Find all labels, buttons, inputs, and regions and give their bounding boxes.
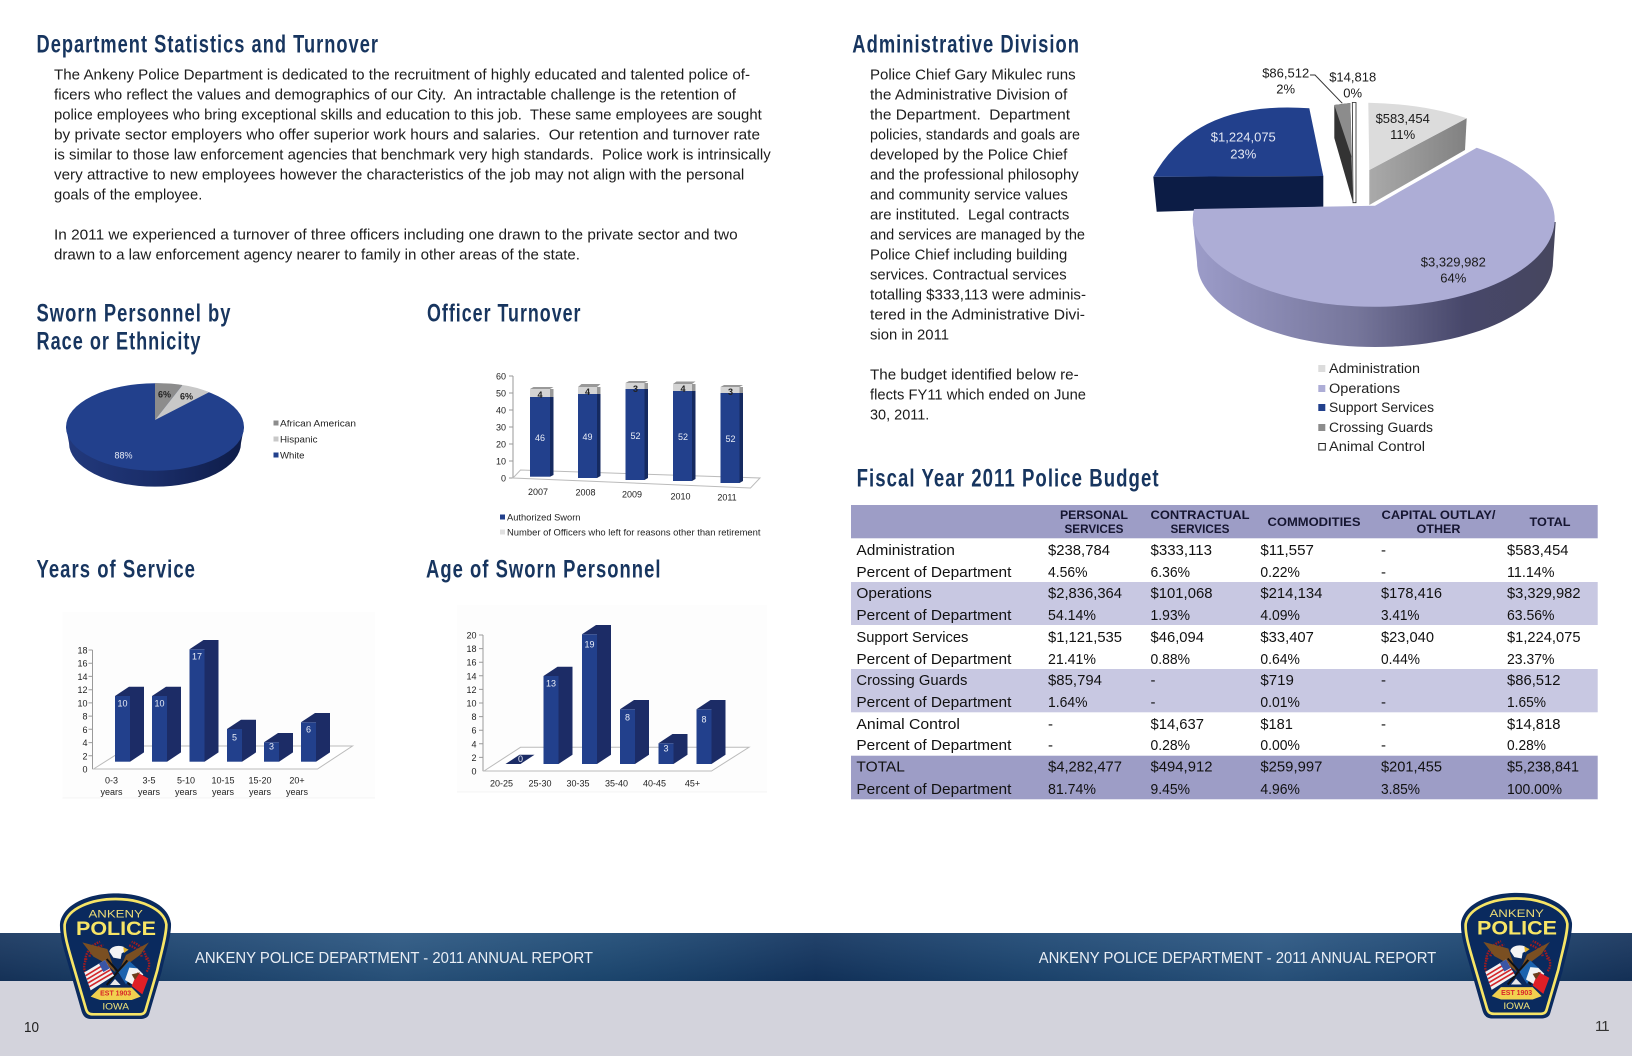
text block: department statistics: In 2011 we experienced a turnover of three officers including one drawn to the private sector and two [54,226,738,243]
row: Crossing Guards: Crossing Guards [856,672,967,689]
heading: Years of Service: Years of Service [36,556,196,584]
bar chart: age of sworn personnel: 8 [625,712,630,722]
bar chart: years of service: 17 [192,652,202,662]
row: TOTAL [856,759,1579,798]
table: police budget [851,505,1598,799]
bar chart: officer turnover: 20 [496,440,506,450]
legend: officer turnover [500,512,761,538]
bar chart: officer turnover: 60 [496,372,506,382]
bar chart: years of service: 16 [77,659,88,669]
bar chart: officer turnover [496,372,760,502]
bar chart: officer turnover: 4 [537,390,543,400]
text block: department statistics: police employees who bring exceptional skills and education to this job. These same employees are sought [54,106,763,123]
table header: SERVICES [1064,524,1124,536]
text block: administrative division: policies, standards and goals are [870,126,1080,143]
row: TOTAL: $259,997 [1260,759,1322,776]
bar chart: years of service: 3 [269,742,274,752]
row: Support Services: $1,121,535 [1048,629,1122,646]
bar chart: years of service [62,612,375,798]
bar chart: years of service: years [138,787,160,797]
pie chart: race or ethnicity: 6% [158,390,171,400]
row: Animal Control: 0.28% [1150,737,1190,754]
bar chart: officer turnover: 0 [501,474,506,484]
icon: police badge left: ANKENY [88,909,144,921]
bar chart: age of sworn personnel: 6 [471,726,476,736]
text block: department statistics: very attractive to new employees however the characteristics of the job may not align with the personal [54,166,744,183]
row: Crossing Guards: 0.01% [1260,694,1300,711]
row: Support Services: $23,040 [1381,629,1434,646]
legend: race or ethnicity: African American [280,418,356,428]
icon: police badge left [60,893,171,1019]
bar chart: officer turnover: 10 [496,456,506,466]
bar chart: years of service: years [249,787,272,797]
icon: police badge right: ANKENY [1489,908,1545,920]
row: Animal Control: - [1048,737,1053,754]
legend: race or ethnicity: White [280,450,304,460]
bar chart: years of service: 8 [82,712,88,722]
row: Support Services: 23.37% [1507,651,1554,668]
pie chart: race or ethnicity [66,383,244,487]
row: Animal Control: $14,818 [1507,716,1560,733]
row: Administration: Percent of Department [856,564,1012,581]
table header: OTHER [1416,524,1461,536]
text block: administrative division: the Administrative Division of [870,86,1068,103]
legend: budget by division: Animal Control [1329,439,1425,454]
row: Administration: $333,113 [1150,542,1212,559]
row: Animal Control: $14,637 [1150,716,1204,733]
row: Crossing Guards: - [1381,694,1386,711]
text block: administrative division: and community service values [870,186,1068,203]
table header: COMMODITIES [1268,517,1361,529]
row: Crossing Guards: $719 [1260,672,1294,689]
pie chart: budget by division: 2% [1276,82,1296,96]
row: Animal Control [856,716,1560,754]
bar chart: years of service: 10 [77,698,88,708]
row: Operations: 63.56% [1507,607,1554,624]
icon: police badge right [1461,893,1572,1018]
row: TOTAL: 9.45% [1150,781,1190,798]
bar chart: age of sworn personnel: 10 [466,698,476,708]
row: Operations [856,585,1580,624]
row: Support Services: $46,094 [1150,629,1204,646]
bar chart: years of service: 14 [77,672,88,682]
text block: administrative division: flects FY11 which ended on June [870,386,1086,403]
row: Support Services: Support Services [856,629,968,646]
row: Support Services: 0.64% [1260,651,1300,668]
row: Operations: $2,836,364 [1048,585,1122,602]
bar chart: officer turnover: 3 [728,387,733,397]
row: Crossing Guards: 1.65% [1507,694,1546,711]
row: Support Services [856,629,1580,668]
bar chart: age of sworn personnel: 20-25 [490,778,513,788]
row: TOTAL: Percent of Department [856,781,1012,798]
footer text: left page: ANKENY POLICE DEPARTMENT - 2011 ANNUAL REPORT [195,950,593,967]
row: Operations: 3.41% [1381,607,1420,624]
bar chart: officer turnover: 52 [678,432,688,442]
bar chart: officer turnover: 30 [496,422,506,432]
bar chart: years of service: 4 [82,738,88,748]
text block: department statistics: drawn to a law enforcement agency nearer to family in other areas of the state. [54,246,580,263]
row: Administration: $238,784 [1048,542,1110,559]
bar chart: officer turnover: 2011 [717,492,737,502]
row: TOTAL: $201,455 [1381,759,1442,776]
bar chart: officer turnover: 4 [585,387,590,397]
row: Administration: 4.56% [1048,564,1088,581]
bar chart: age of sworn personnel: 2 [471,753,476,763]
row: Administration: 0.22% [1260,564,1300,581]
row: Administration: $11,557 [1260,542,1314,559]
bar chart: officer turnover: 2008 [575,488,596,498]
bar chart: age of sworn personnel: 40-45 [643,778,666,788]
bar chart: age of sworn personnel [457,605,767,792]
heading: Sworn Personnel by Race or Ethnicity: Sworn Personnel by [36,300,232,328]
bar chart: years of service: 2 [82,751,88,761]
icon: police badge left: IOWA [102,1001,129,1011]
row: Animal Control: 0.00% [1260,737,1300,754]
row: Crossing Guards: $86,512 [1507,672,1560,689]
bar chart: age of sworn personnel: 18 [466,644,476,654]
row: Animal Control: Animal Control [856,716,960,733]
text block: administrative division: the Department. Department [870,106,1071,123]
table header: SERVICES [1170,524,1230,536]
icon: police badge left: POLICE [76,919,156,940]
text block: department statistics: goals of the employee. [54,186,202,203]
icon: police badge right: POLICE [1477,918,1557,939]
bar chart: age of sworn personnel: 0 [518,754,523,764]
row: Administration: Administration [856,542,955,559]
bar chart: officer turnover: 3 [633,384,638,394]
row: Operations: 1.93% [1150,607,1190,624]
bar chart: age of sworn personnel: 12 [466,685,476,695]
bar chart: years of service: 0 [82,764,88,774]
bar chart: years of service: 10 [117,698,128,708]
icon: police badge right: IOWA [1503,1001,1530,1011]
bar chart: years of service: years [175,787,198,797]
text block: administrative division [870,66,1086,423]
row: TOTAL: $5,238,841 [1507,759,1579,776]
legend: race or ethnicity: Hispanic [280,434,318,444]
bar chart: age of sworn personnel: 30-35 [566,778,590,788]
pie chart: budget by division [1153,66,1556,347]
bar chart: years of service: 12 [77,685,88,695]
bar chart: age of sworn personnel: 8 [471,712,476,722]
bar chart: age of sworn personnel: 20 [466,630,476,640]
row: Operations: Percent of Department [856,607,1012,624]
pie chart: budget by division: $1,224,075 [1211,130,1276,144]
heading: Administrative Division: Administrative Division [852,31,1080,59]
row: Administration [856,542,1568,581]
bar chart: officer turnover: 40 [496,406,506,416]
row: Crossing Guards: - [1150,672,1156,689]
bar chart: years of service: 18 [77,646,88,656]
heading: Sworn Personnel by Race or Ethnicity: Race or Ethnicity [36,327,202,355]
bar chart: years of service: 15-20 [248,776,272,786]
text block: administrative division: and the professional philosophy [870,166,1079,183]
bar chart: age of sworn personnel: 16 [466,658,476,668]
row: Support Services: 21.41% [1048,651,1096,668]
bar chart: age of sworn personnel: 35-40 [605,778,628,788]
row: Support Services: 0.44% [1381,651,1420,668]
bar chart: years of service: 3-5 [142,776,156,786]
table header: TOTAL [1530,517,1570,529]
row: Operations: $178,416 [1381,585,1442,602]
row: Crossing Guards [856,672,1560,711]
bar chart: officer turnover: 52 [725,434,736,444]
icon: police badge left: EST 1903 [100,991,131,998]
page number: 10: 10 [24,1019,39,1036]
bar chart: years of service: years [212,787,234,797]
text block: administrative division: and services are managed by the [870,226,1085,243]
pie chart: budget by division: $86,512 [1262,66,1309,80]
bar chart: years of service: 5-10 [177,776,195,786]
legend: budget by division [1318,361,1434,454]
row: Crossing Guards: - [1381,672,1386,689]
heading: Department Statistics and Turnover: Department Statistics and Turnover [36,31,379,59]
text block: administrative division: services. Contractual services [870,266,1067,283]
text block: administrative division: Police Chief including building [870,246,1067,263]
bar chart: years of service: years [100,787,123,797]
bar chart: officer turnover: 2007 [528,487,548,497]
bar chart: years of service: years [286,787,308,797]
legend: budget by division: Administration [1329,361,1420,376]
row: TOTAL: $4,282,477 [1048,759,1122,776]
row: TOTAL: 3.85% [1381,781,1420,798]
legend: budget by division: Operations [1329,381,1400,396]
row: Support Services: $33,407 [1260,629,1314,646]
row: Support Services: Percent of Department [856,651,1012,668]
table header [1060,510,1570,536]
footer text: right page: ANKENY POLICE DEPARTMENT - 2011 ANNUAL REPORT [1039,950,1436,967]
bar chart: age of sworn personnel: 0 [471,766,476,776]
pie chart: budget by division: $14,818 [1329,70,1376,84]
row: Crossing Guards: - [1150,694,1156,711]
row: Administration: - [1381,564,1386,581]
pie chart: budget by division: 0% [1343,86,1363,100]
row: Animal Control: - [1381,737,1386,754]
bar chart: years of service: 6 [306,724,311,734]
text block: department statistics: by private sector employers who offer superior work hours and salaries. Our retention and turnover rate [54,126,760,143]
bar chart: age of sworn personnel: 19 [584,640,595,650]
heading: Age of Sworn Personnel: Age of Sworn Personnel [426,556,662,584]
text block: administrative division: developed by the Police Chief [870,146,1068,163]
legend: officer turnover: Authorized Sworn [507,512,580,522]
row: Operations: 54.14% [1048,607,1096,624]
pie chart: budget by division: $3,329,982 [1421,254,1486,270]
pie chart: budget by division: $583,454 [1376,111,1430,126]
row: TOTAL: 100.00% [1507,781,1562,798]
legend: officer turnover: Number of Officers who left for reasons other than retirement [507,528,761,538]
row: Operations: $214,134 [1260,585,1322,602]
text block: administrative division: sion in 2011 [870,326,949,343]
bar chart: years of service: 0-3 [105,776,118,786]
row: Administration: 6.36% [1150,564,1190,581]
row: Animal Control: 0.28% [1507,737,1546,754]
footer: blue band [0,933,1632,981]
bar chart: officer turnover: 49 [582,432,593,442]
row: Operations: 4.09% [1260,607,1300,624]
text block: administrative division: are instituted. Legal contracts [870,206,1069,223]
bar chart: age of sworn personnel: 25-30 [528,778,552,788]
row: Animal Control: - [1381,716,1386,733]
row: Crossing Guards: 1.64% [1048,694,1088,711]
row: Support Services: $1,224,075 [1507,629,1580,646]
table header: CAPITAL OUTLAY/ [1382,510,1496,522]
pie chart: race or ethnicity: 6% [180,392,193,402]
row: Administration: - [1381,542,1386,559]
row: TOTAL: 81.74% [1048,781,1096,798]
table header: CONTRACTUAL [1150,510,1250,522]
bar chart: age of sworn personnel: 45+ [685,778,700,788]
bar chart: officer turnover: 46 [535,433,545,443]
bar chart: age of sworn personnel: 13 [546,678,556,688]
bar chart: officer turnover: 2010 [670,492,691,502]
row: TOTAL: TOTAL [856,759,905,776]
pie chart: budget by division: 11% [1390,127,1416,142]
row: TOTAL: 4.96% [1260,781,1300,798]
legend: budget by division: Crossing Guards [1329,420,1433,435]
bar chart: years of service: 10-15 [211,776,235,786]
pie chart: budget by division: 64% [1440,270,1467,286]
text block: administrative division: Police Chief Gary Mikulec runs [870,66,1076,83]
bar chart: age of sworn personnel: 3 [663,744,669,754]
bar chart: years of service: 5 [232,732,237,742]
text block: administrative division: totalling $333,113 were adminis- [870,286,1086,303]
text block: administrative division: The budget identified below re- [870,366,1079,383]
text block: administrative division: tered in the Administrative Divi- [870,306,1085,323]
text block: department statistics [54,66,771,263]
row: Crossing Guards: Percent of Department [856,694,1012,711]
bar chart: officer turnover: 2009 [622,490,642,500]
bar chart: years of service: 20+ [289,776,305,786]
pie chart: budget by division: 23% [1230,146,1257,162]
row: Operations: $3,329,982 [1507,585,1580,602]
row: Operations: $101,068 [1150,585,1212,602]
text block: department statistics: is similar to those law enforcement agencies that benchmark very high standards. Police work is intrinsically [54,146,771,163]
heading: Fiscal Year 2011 Police Budget: Fiscal Year 2011 Police Budget [857,464,1160,492]
row: Animal Control: $181 [1260,716,1293,733]
row: Administration: 11.14% [1507,564,1554,581]
bar chart: officer turnover: 4 [680,384,686,394]
heading: Officer Turnover: Officer Turnover [427,300,582,328]
row: Administration: $583,454 [1507,542,1568,559]
row: Animal Control: Percent of Department [856,737,1012,754]
page number: 11: 11 [1595,1018,1609,1035]
row: Crossing Guards: $85,794 [1048,672,1102,689]
bar chart: years of service: 10 [154,698,165,708]
text block: department statistics: The Ankeny Police Department is dedicated to the recruitment of highly educated and talented police of- [54,66,750,83]
heading: Sworn Personnel by Race or Ethnicity [36,300,232,355]
legend: budget by division: Support Services [1329,400,1434,415]
text block: administrative division: 30, 2011. [870,406,929,423]
text block: department statistics: ficers who reflect the values and demographics of our City. An intractable challenge is the retention of [54,86,737,103]
row: TOTAL: $494,912 [1150,759,1212,776]
legend: race or ethnicity [274,418,356,460]
icon: police badge right: EST 1903 [1501,990,1532,997]
row: Operations: Operations [856,585,932,602]
bar chart: age of sworn personnel: 4 [471,739,476,749]
table header: PERSONAL [1060,510,1128,522]
row: Animal Control: - [1048,716,1053,733]
bar chart: officer turnover: 52 [630,431,641,441]
bar chart: age of sworn personnel: 8 [701,714,707,724]
row: Support Services: 0.88% [1150,651,1190,668]
bar chart: age of sworn personnel: 14 [466,671,476,681]
bar chart: years of service: 6 [82,725,88,735]
footer: grey strip [0,981,1632,1056]
pie chart: race or ethnicity: 88% [114,450,133,460]
bar chart: officer turnover: 50 [496,388,506,398]
